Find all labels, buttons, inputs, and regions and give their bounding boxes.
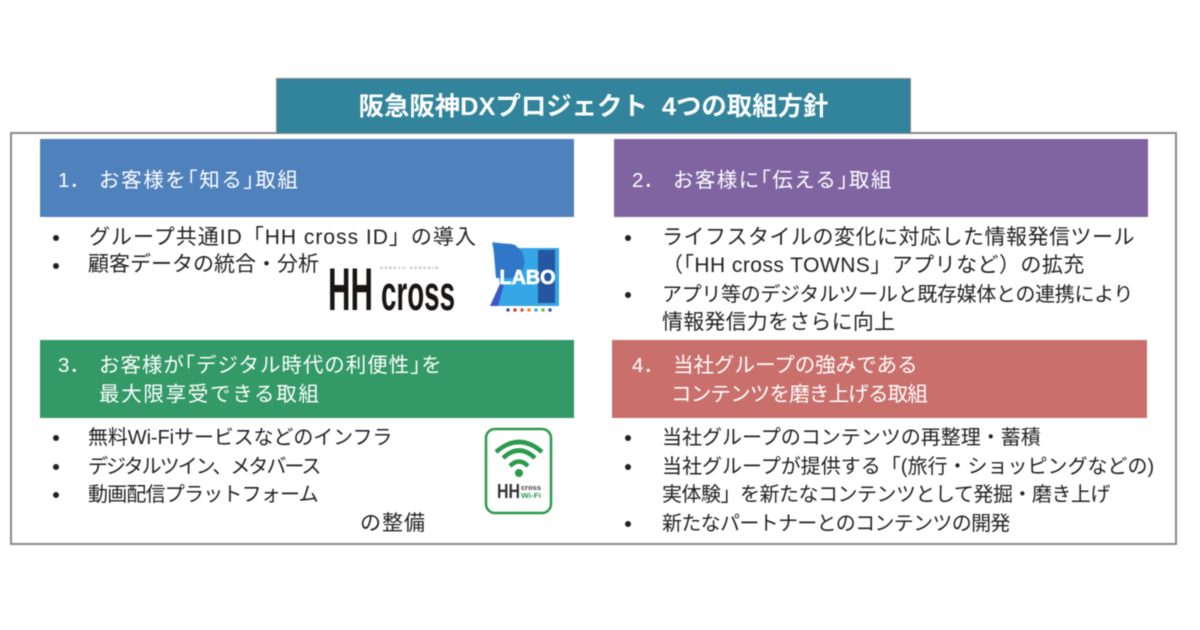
panel 2 heading: お客様に｢伝える｣取組 [673,169,893,192]
bullet text 3: 動画配信プラットフォーム [88,484,318,506]
panel 3 heading: 3． [58,354,90,377]
logo: DX LABO: LABO [500,267,556,289]
bullet text 2 continued: 実体験」を新たなコンテンツとして発掘・磨き上げ [662,484,1110,506]
panel 1 header [40,139,574,217]
bullet text 3: 新たなパートナーとのコンテンツの開発 [662,513,1010,535]
bullet text 1: 無料Wi-Fiサービスなどのインフラ [88,427,392,449]
panel 2 heading: 2． [632,169,664,192]
panel 3 heading: お客様が｢デジタル時代の利便性｣を [99,354,443,377]
bullet text 1: 当社グループのコンテンツの再整理・蓄積 [662,427,1041,449]
panel 4 heading: 4． [632,354,664,377]
outer frame [10,132,1177,545]
panel 1 list [52,225,477,276]
icon: HH cross Wi-Fi [484,426,554,516]
bullet text 2: 顧客データの統合・分析 [88,253,319,276]
logo: HH cross: HANKYU HANSHIN [380,265,438,270]
bullet text 1: ライフスタイルの変化に対応した情報発信ツール [662,226,1135,249]
closing text: の整備 [360,512,426,535]
panel 3 heading line 2: 最大限享受できる取組 [99,383,321,406]
panel 4 header [612,340,1147,418]
bullet text 1 continued: （「HH cross TOWNS」アプリなど）の拡充 [662,254,1085,277]
panel 2 list [624,225,1135,334]
bullet text 1: グループ共通ID「HH cross ID」の導入 [89,226,477,249]
icon: HH cross Wi-Fi: Wi-Fi [521,491,541,500]
panel 1 heading: お客様を｢知る｣取組 [99,169,300,192]
panel 2 header [614,139,1148,217]
title banner [276,78,911,133]
logo: HH cross [328,262,455,314]
icon: HH cross Wi-Fi: cross [521,485,541,492]
bullet text 2: 当社グループが提供する「(旅行・ショッピングなどの) [662,456,1154,478]
panel 4 heading line 2: コンテンツを磨き上げる取組 [671,383,927,406]
panel 3 header [40,340,574,418]
title text: 阪急阪神DXプロジェクト 4つの取組方針 [359,93,828,121]
logo: DX LABO [490,241,560,312]
panel 4 list [624,426,1154,535]
panel 4 heading: 当社グループの強みである [673,354,918,377]
panel 3 list [52,426,426,535]
bullet text 2: アプリ等のデジタルツールと既存媒体との連携により [662,284,1133,306]
icon: HH cross Wi-Fi: HH [497,481,520,503]
bullet text 2: デジタルツイン、メタバース [88,456,319,478]
panel 1 heading: 1． [58,169,90,192]
bullet text 2 continued: 情報発信力をさらに向上 [662,311,895,334]
